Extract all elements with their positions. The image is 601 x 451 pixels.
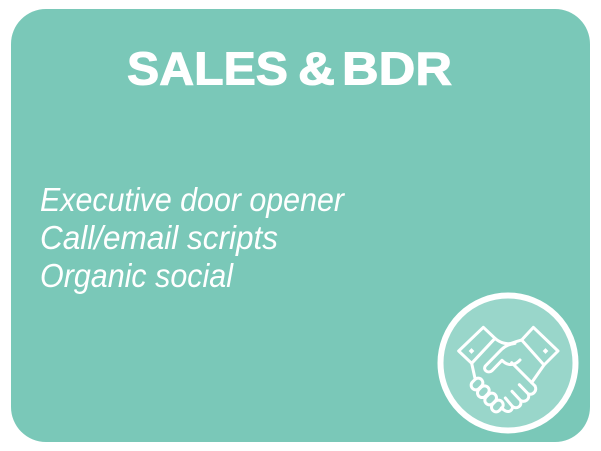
title: SALES — [127, 42, 288, 94]
text block: activities list: Organic social — [40, 257, 235, 294]
text block: activities list — [40, 181, 346, 294]
icon: handshake in circle — [440, 296, 576, 430]
title: BDR — [342, 42, 452, 94]
text block: activities list: Call/email scripts — [40, 219, 278, 256]
icon: right cuff button — [543, 348, 548, 354]
icon: left cuff button — [469, 348, 474, 354]
text block: activities list: Executive door opener — [40, 181, 346, 218]
title: & — [298, 42, 335, 94]
title — [127, 42, 452, 94]
